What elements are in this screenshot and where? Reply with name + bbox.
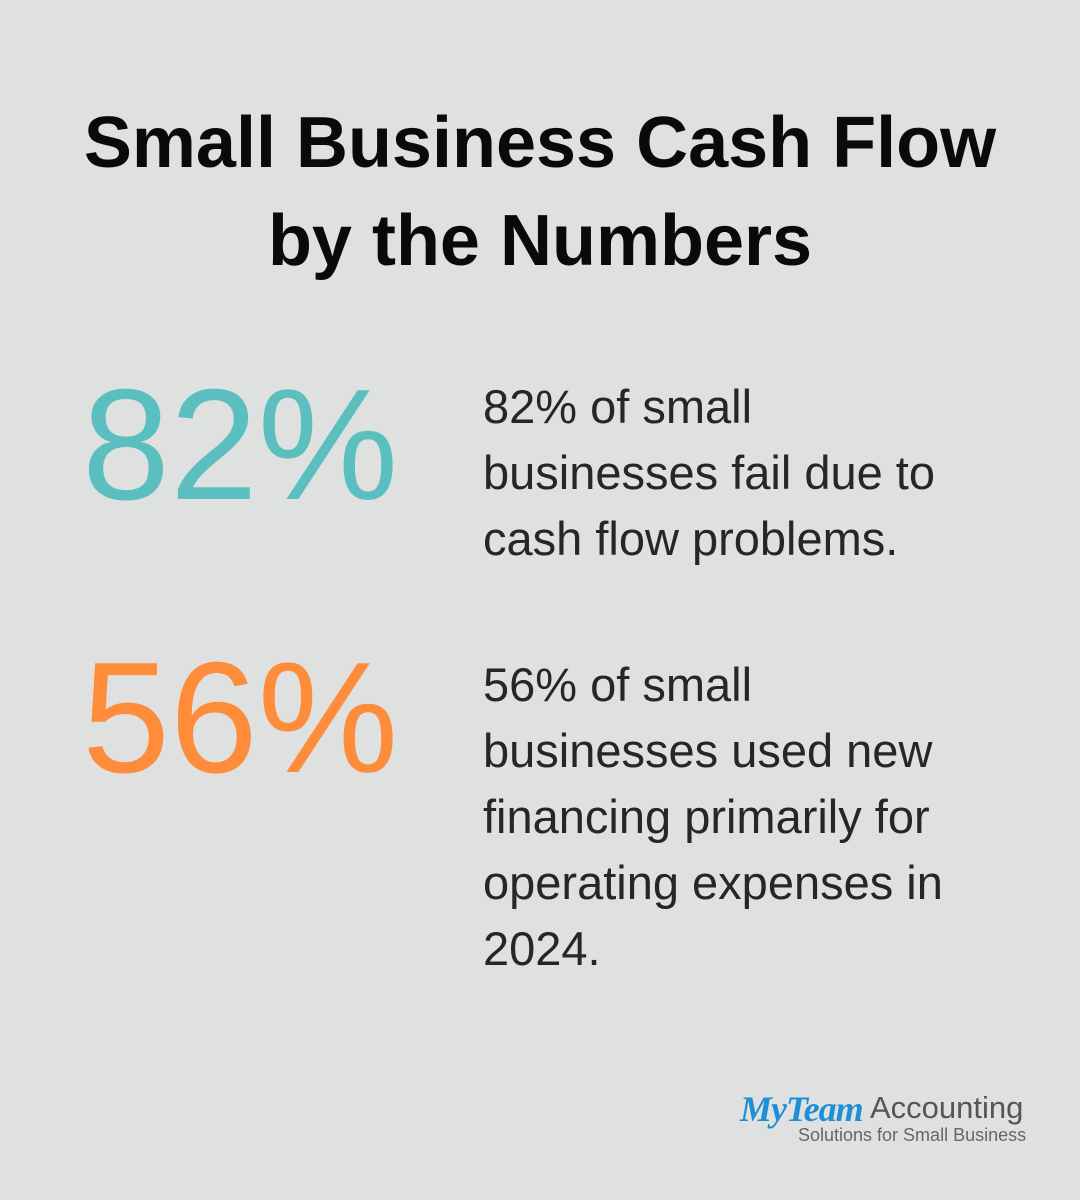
text: 56% description: businesses used new <box>483 724 932 777</box>
text: 56% description: 56% of small <box>483 658 752 711</box>
stat: 56%: 56% <box>82 630 398 806</box>
text: 82% description: 82% of small <box>483 380 752 433</box>
logo: Solutions for Small Business <box>798 1125 1026 1145</box>
text: 56% description: operating expenses in <box>483 856 943 909</box>
text: 56% description: 2024. <box>483 922 601 975</box>
text: 82% description <box>483 380 935 565</box>
title: by the Numbers <box>268 201 812 281</box>
logo: MyTeam <box>740 1089 863 1129</box>
logo <box>740 1089 1026 1145</box>
text: 82% description: businesses fail due to <box>483 446 935 499</box>
text: 56% description <box>483 658 943 975</box>
text: 56% description: financing primarily for <box>483 790 930 843</box>
logo: Accounting <box>870 1090 1023 1125</box>
title <box>84 103 996 281</box>
stat: 82%: 82% <box>82 357 398 533</box>
text: 82% description: cash flow problems. <box>483 512 898 565</box>
title: Small Business Cash Flow <box>84 103 996 183</box>
